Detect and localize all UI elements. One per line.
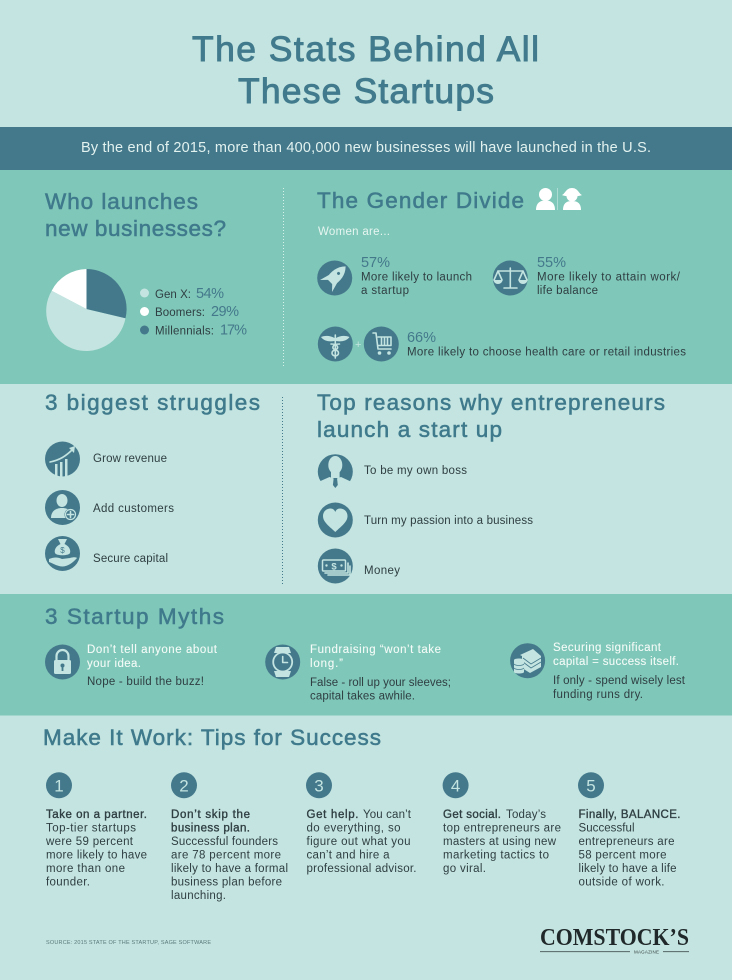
stat: 55% work life balance: 55%: [537, 255, 566, 271]
icon: wristwatch: [265, 644, 300, 680]
stat: 57% launch a startup: [317, 255, 472, 297]
banner: 400,000 new businesses: By the end of 2015, more than 400,000 new businesses will have launched in the U.S.: [81, 140, 651, 156]
heading: make it work: Make It Work: Tips for Success: [43, 725, 381, 750]
tip 5: Finally, BALANCE.: [578, 809, 680, 821]
stat: 66% health care or retail: [318, 326, 686, 362]
tip 4: top entrepreneurs are: [443, 822, 561, 834]
tip 1: founder.: [46, 876, 90, 888]
icon: banknotes: $: [331, 562, 337, 572]
icon: growth chart: [45, 442, 80, 478]
myth: fundraising time: Fundraising “won’t take: [310, 644, 441, 656]
heading: 3 startup myths: 3 Startup Myths: [45, 604, 224, 629]
icon: shopping cart: [364, 326, 399, 362]
item: add customers: Add customers: [93, 503, 174, 515]
myth: significant capital: capital = success itself.: [553, 656, 679, 668]
tip 3: [306, 772, 416, 875]
item: be my own boss: To be my own boss: [364, 465, 467, 477]
pie legend: Boomers:: [155, 307, 205, 319]
item: money: [318, 548, 400, 584]
tip 5: likely to have a life: [578, 863, 676, 875]
stat: 55% work life balance: [493, 255, 681, 297]
number badge 3: 3: [314, 776, 324, 796]
icon: heart: [318, 502, 353, 538]
stat: 55% work life balance: More likely to attain work/: [537, 272, 681, 284]
myth: significant capital: [510, 642, 686, 701]
number badge 1: 1: [54, 776, 64, 796]
tip 3: can’t and hire a: [306, 850, 390, 862]
tip 1: [45, 772, 147, 888]
tip 2: Don’t skip the: [171, 809, 250, 821]
myth: significant capital: funding runs dry.: [553, 689, 643, 701]
heading: top reasons: Top reasons why entrepreneurs: [317, 390, 665, 415]
heading: who launches new businesses: [45, 189, 226, 241]
tip 5: 58 percent more: [578, 850, 666, 862]
tip 3: professional advisor.: [306, 863, 416, 875]
number badge 5: 5: [586, 776, 596, 796]
tip 2: likely to have a formal: [171, 863, 288, 875]
tip 4: Today’s: [506, 809, 546, 821]
tip 4: [443, 772, 561, 875]
icon: man and woman: [536, 188, 582, 210]
tip 4: masters at using new: [443, 836, 557, 848]
icon: caduceus: [318, 326, 353, 362]
item: add customers: [45, 490, 174, 525]
item: grow revenue: Grow revenue: [93, 453, 167, 465]
tip 1: Top-tier startups: [46, 822, 136, 834]
tip 1: Take on a partner.: [46, 809, 147, 821]
tip 4: go viral.: [443, 863, 486, 875]
banner: 400,000 new businesses: [0, 127, 732, 170]
stat: 66% health care or retail: More likely to choose health care or retail industries: [407, 346, 686, 358]
heading: who launches new businesses: new businesses?: [45, 216, 226, 241]
item: secure capital: [45, 536, 168, 571]
tip 2: Successful founders: [171, 836, 278, 848]
pie legend: 54%: [196, 286, 224, 302]
tip 5: Successful: [578, 822, 634, 834]
myth: fundraising time: False - roll up your sleeves;: [310, 677, 451, 689]
tip 3: figure out what you: [306, 836, 410, 848]
icon: cash and coins: [510, 643, 545, 678]
item: passion into a business: Turn my passion into a business: [364, 515, 533, 527]
myth: significant capital: Securing significant: [553, 642, 662, 654]
stat: 57% launch a startup: a startup: [361, 285, 409, 297]
myth: fundraising time: long.”: [310, 658, 343, 670]
myth: tell anyone: Nope - build the buzz!: [87, 676, 204, 688]
myth: tell anyone: Don’t tell anyone about: [87, 644, 218, 656]
tip 2: are 78 percent more: [171, 850, 281, 862]
tip 3: You can’t: [363, 809, 412, 821]
plus sign: +: [355, 339, 361, 351]
stat: 57% launch a startup: More likely to launch: [361, 272, 472, 284]
icon: businessman: [316, 454, 354, 491]
title: The Stats Behind All: [192, 29, 539, 69]
tip 2: business plan before: [171, 876, 282, 888]
heading: 3 biggest struggles: 3 biggest struggles: [45, 390, 260, 415]
icon: add user: [45, 490, 80, 525]
icon: scales: [493, 260, 528, 296]
stat: 57% launch a startup: 57%: [361, 255, 390, 271]
heading: who launches new businesses: Who launches: [45, 189, 198, 214]
pie legend: 17%: [220, 322, 247, 338]
item: passion into a business: [318, 502, 533, 538]
icon: padlock: [45, 644, 80, 680]
heading: top reasons: [317, 390, 665, 442]
logo: Comstock's Magazine: MAGAZINE: [634, 950, 659, 954]
pie legend: [140, 286, 247, 338]
panel: struggles and reasons: [45, 390, 665, 584]
item: money: Money: [364, 565, 400, 577]
source note: SOURCE: 2015 STATE OF THE STARTUP, SAGE SOFTWARE: [46, 940, 211, 946]
text: women are: Women are...: [318, 226, 390, 238]
tip 1: were 59 percent: [45, 836, 134, 848]
tip 4: Get social.: [443, 809, 501, 821]
tip 1: more than one: [46, 863, 125, 875]
tip 2: launching.: [171, 890, 226, 902]
tip 5: entrepreneurs are: [578, 836, 674, 848]
myth: significant capital: If only - spend wisely lest: [553, 675, 686, 687]
tip 5: outside of work.: [578, 876, 664, 888]
number badge 2: 2: [179, 776, 189, 796]
heading: top reasons: launch a start up: [317, 417, 502, 442]
number badge 4: 4: [451, 776, 460, 796]
icon: rocket: [317, 260, 352, 296]
icon: money bag in hand: $: [60, 546, 65, 555]
item: secure capital: Secure capital: [93, 553, 168, 565]
panel: 3 startup myths: [0, 594, 732, 716]
tip 2: business plan.: [171, 822, 250, 834]
item: grow revenue: [45, 442, 167, 478]
title: These Startups: [238, 71, 494, 111]
tip 1: more likely to have: [46, 850, 147, 862]
stat: 55% work life balance: life balance: [537, 285, 598, 297]
pie legend: 29%: [211, 304, 239, 320]
pie legend: Gen X:: [155, 289, 191, 301]
tip 5: [578, 772, 680, 888]
tip 2: [171, 772, 288, 902]
tip 4: marketing tactics to: [443, 850, 549, 862]
tip 3: do everything, so: [306, 822, 400, 834]
pie chart: [46, 269, 127, 351]
stat: 66% health care or retail: 66%: [407, 330, 436, 346]
heading: the gender divide: The Gender Divide: [317, 188, 524, 213]
myth: tell anyone: your idea.: [87, 658, 141, 670]
item: be my own boss: [316, 454, 467, 491]
title: [192, 29, 539, 111]
pie legend: Millennials:: [155, 326, 214, 338]
tip 3: Get help.: [306, 809, 358, 821]
myth: fundraising time: [265, 644, 451, 702]
logo: Comstock's Magazine: COMSTOCK’S: [540, 925, 689, 951]
myth: tell anyone: [45, 644, 218, 688]
myth: fundraising time: capital takes awhile.: [310, 690, 415, 702]
panel: who launches and gender divide: [0, 170, 732, 384]
